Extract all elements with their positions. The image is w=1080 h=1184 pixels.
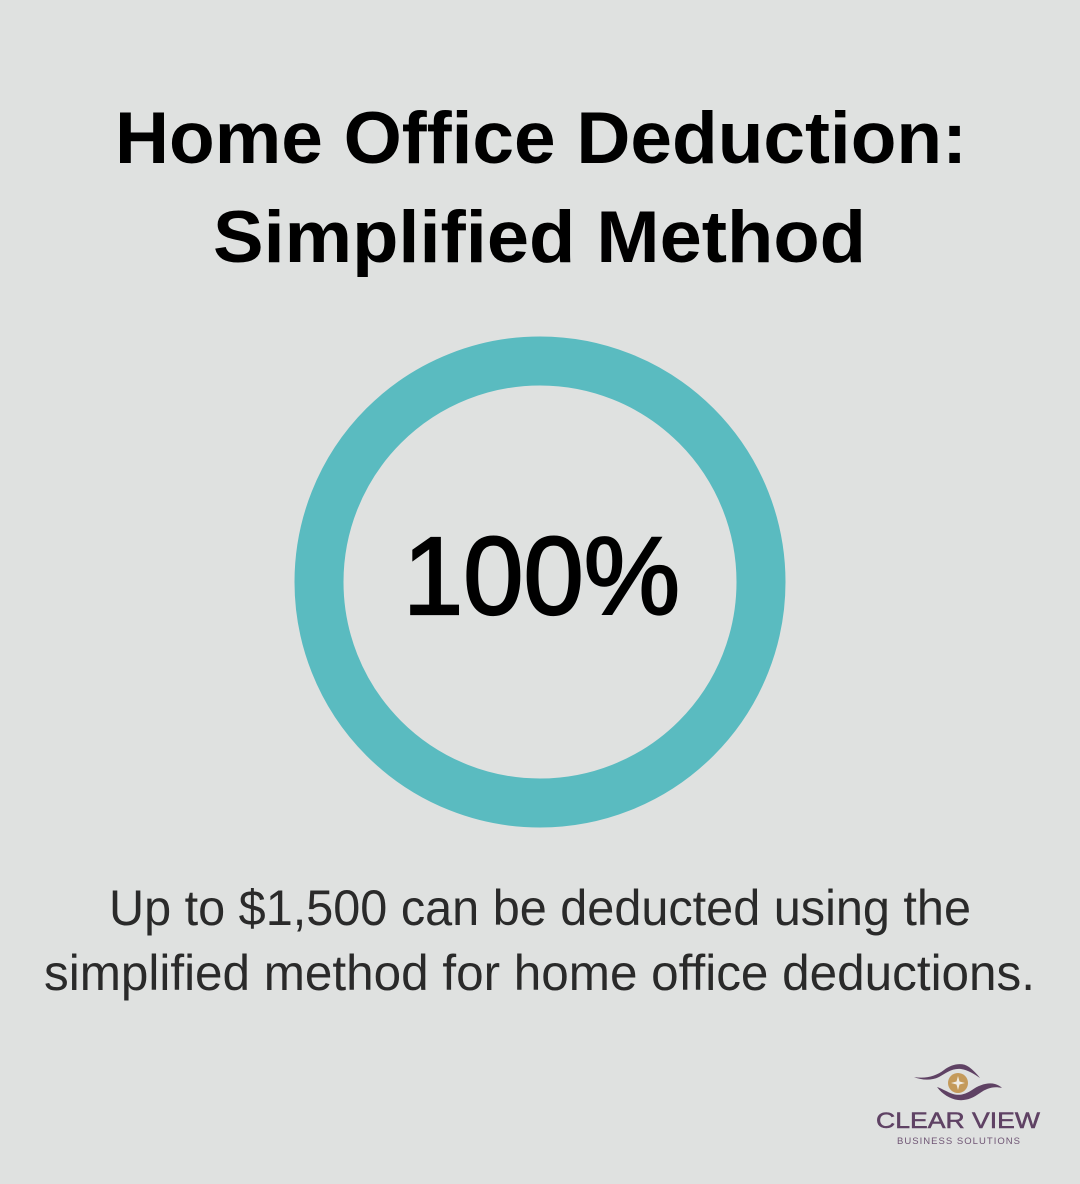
percentage value: 100% xyxy=(403,515,680,638)
logo wordmark: CLEAR VIEW xyxy=(876,1108,1040,1133)
description text: simplified method for home office deductions. xyxy=(44,945,1035,1001)
title: Home Office Deduction: xyxy=(115,98,967,179)
description text: Up to $1,500 can be deducted using the xyxy=(109,880,971,936)
title: Simplified Method xyxy=(213,197,866,278)
logo: Clear View Business Solutions xyxy=(876,1064,1040,1147)
icon: eye with star xyxy=(914,1064,1002,1100)
description text xyxy=(44,880,1035,1001)
logo tagline: BUSINESS SOLUTIONS xyxy=(897,1136,1020,1147)
donut chart: 100% xyxy=(319,361,761,803)
title xyxy=(115,98,967,278)
